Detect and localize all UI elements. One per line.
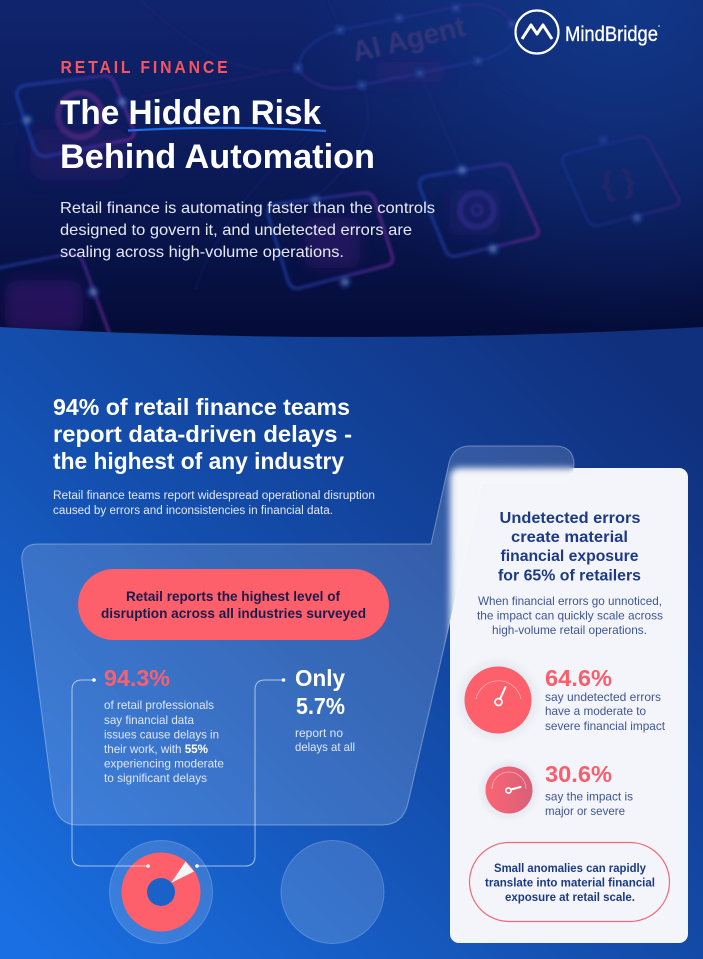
stat: only 5.7%: Only <box>295 665 345 691</box>
stat: only 5.7%: report no <box>295 726 343 740</box>
eyebrow: RETAIL FINANCE <box>60 57 228 77</box>
stat: 94.3%: their work, with 55% <box>104 742 208 756</box>
panel heading: financial exposure <box>500 548 639 565</box>
outlined callout <box>470 842 670 922</box>
panel heading: Undetected errors <box>500 510 640 527</box>
section subtext: caused by errors and inconsistencies in financial data. <box>53 505 333 517</box>
intro paragraph <box>60 200 435 261</box>
panel intro: When financial errors go unnoticed, <box>478 594 662 608</box>
panel intro <box>477 594 663 637</box>
panel heading: create material <box>511 529 628 546</box>
stat: only 5.7%: delays at all <box>295 740 355 754</box>
panel heading <box>498 510 641 584</box>
intro paragraph: Retail finance is automating faster than the controls <box>60 200 435 217</box>
white panel background <box>450 468 688 943</box>
cart wheel: pie chart <box>110 840 212 944</box>
stat: 94.3%: of retail professionals <box>104 698 214 712</box>
stat: 94.3%: say financial data <box>104 713 194 727</box>
callout pill: disruption across all industries surveyed <box>101 605 366 621</box>
connector: 5.7% to pie <box>195 678 285 868</box>
section heading <box>53 394 352 474</box>
stat: 64.6%: have a moderate to <box>545 704 646 718</box>
section heading: 94% of retail finance teams <box>53 394 350 420</box>
gauge icon: 64.6% <box>454 656 542 744</box>
stat: 30.6%: major or severe <box>545 804 625 818</box>
gauge icon: 30.6% <box>477 758 541 822</box>
section heading: the highest of any industry <box>53 448 344 474</box>
intro paragraph: scaling across high-volume operations. <box>60 244 344 261</box>
outlined callout: translate into material financial <box>485 878 655 890</box>
section subtext: Retail finance teams report widespread operational disruption <box>53 490 375 502</box>
connector: 94.3% to pie <box>72 678 150 868</box>
stat: 64.6%: say undetected errors <box>545 690 661 704</box>
title underline <box>128 128 326 131</box>
title: The Hidden Risk <box>60 94 321 132</box>
stat: 30.6% <box>545 761 633 818</box>
stat: only 5.7% <box>295 665 355 754</box>
panel intro: high-volume retail operations. <box>492 623 647 637</box>
panel intro: the impact can quickly scale across <box>477 608 663 622</box>
callout pill: Retail reports the highest level of <box>126 588 340 604</box>
section heading: report data-driven delays - <box>53 421 352 447</box>
title <box>60 94 375 176</box>
outlined callout: exposure at retail scale. <box>505 892 635 904</box>
callout pill <box>78 569 389 640</box>
header panel with faded workflow artwork <box>0 0 703 340</box>
faded code braces: { } <box>599 162 637 202</box>
panel heading: for 65% of retailers <box>498 568 641 584</box>
stat: 30.6%: 30.6% <box>545 761 612 787</box>
intro paragraph: designed to govern it, and undetected errors are <box>60 222 412 239</box>
cart wheel: empty <box>281 840 384 944</box>
stat: 94.3% <box>104 665 224 785</box>
logo: MindBridge <box>565 23 658 46</box>
stat: 64.6%: 64.6% <box>545 665 612 691</box>
stat: 64.6%: severe financial impact <box>545 719 666 733</box>
logo <box>516 10 660 54</box>
outlined callout: Small anomalies can rapidly <box>494 863 647 875</box>
stat: 64.6% <box>545 665 666 733</box>
title: Behind Automation <box>60 138 375 176</box>
stat: 94.3%: issues cause delays in <box>104 728 219 742</box>
stat: 94.3%: experiencing moderate <box>104 756 224 770</box>
frosted shopping cart body <box>22 446 574 825</box>
section subtext <box>53 490 375 517</box>
cart outline <box>22 446 574 825</box>
faded AI Agent label: AI Agent <box>349 11 469 69</box>
stat: 94.3%: to significant delays <box>104 771 207 785</box>
stat: 94.3%: 94.3% <box>104 665 170 691</box>
stat: only 5.7%: 5.7% <box>296 693 345 719</box>
stat: 30.6%: say the impact is <box>545 790 633 804</box>
